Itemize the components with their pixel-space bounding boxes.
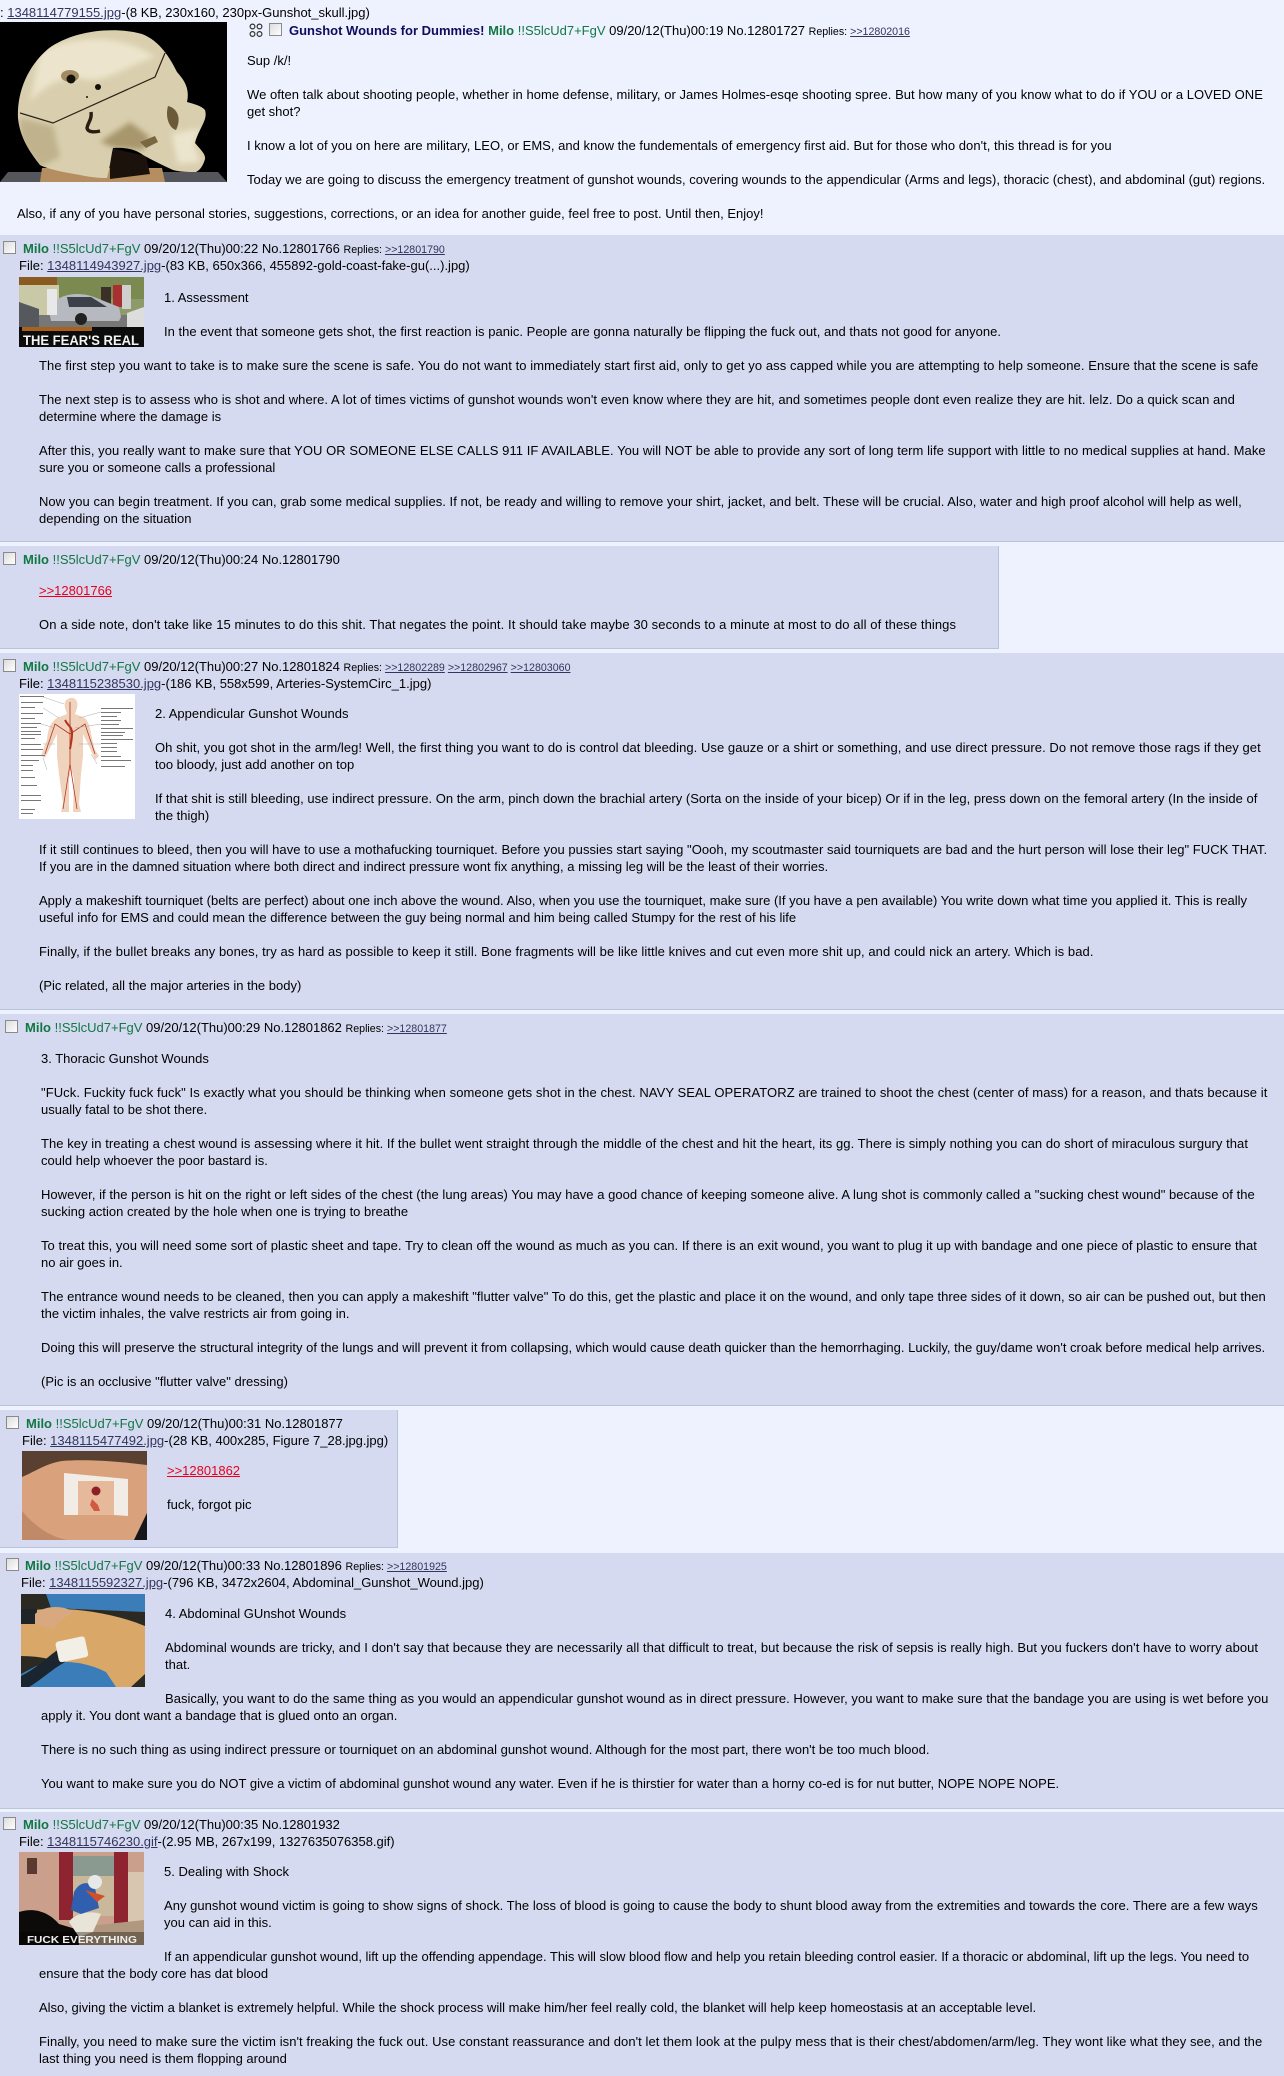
text block: thoracic wounds [41, 1051, 1268, 1389]
file info line: File: 1348115746230.gif-(2.95 MB, 267x199, 1327635076358.gif) [19, 1834, 395, 1849]
text block: shock treatment: Finally, you need to make sure the victim isn't freaking the fuck out. Use constant reassurance and don't let them look at the pulpy mess that is their chest/abdomen/arm/leg. They wont like what they see, and the [39, 2034, 1262, 2049]
text block: appendicular intro: too bloody, just add another on top [155, 757, 354, 772]
text block: intro: I know a lot of you on here are military, LEO, or EMS, and know the fundementals of emergency first aid. But for those who don't, this thread is for you [247, 138, 1112, 153]
image: abdominal wound photo [21, 1594, 145, 1687]
text block: abdominal intro [165, 1606, 1268, 1706]
text block: thoracic wounds: Doing this will preserve the structural integrity of the lungs and will prevent it from collapsing, which would cause death quicker than the hemorrhaging. Luckily, the guy/dame won't croak before medical help arrives. [41, 1340, 1265, 1355]
checkbox [6, 1558, 19, 1571]
text block: tourniquet advice: (Pic related, all the major arteries in the body) [39, 978, 301, 993]
text block: thoracic wounds: usually fatal to be shot there. [41, 1102, 207, 1117]
text block: abdominal treatment [41, 1708, 1059, 1791]
checkbox [5, 1020, 18, 1033]
text block: shock intro: If an appendicular gunshot wound, lift up the offending appendage. This will slow blood flow and help you retain bleeding control easier. If a thoracic or abdominal, lift up the legs. You need to [164, 1949, 1249, 1964]
panel: post 7 dealing with shock [0, 1812, 1284, 2076]
text block: intro: Today we are going to discuss the emergency treatment of gunshot wounds, covering wounds to the appendicular (Arms and legs), thoracic (chest), and abdominal (gut) regions. [247, 172, 1265, 187]
text block: thoracic wounds: sucking action created by the hole when one is trying to breathe [41, 1204, 408, 1219]
panel: post 3 appendicular wounds [0, 653, 1284, 1010]
text block: closing note: Also, if any of you have personal stories, suggestions, corrections, or an idea for another guide, feel free to post. Until then, Enjoy! [17, 206, 763, 221]
post header: Milo !!S5lcUd7+FgV 09/20/12(Thu)00:29 No.12801862 Replies: >>12801877 [25, 1020, 447, 1035]
text block: thoracic wounds: The key in treating a chest wound is assessing where it hit. If the bullet went straight through the middle of the chest and hit the heart, its gg. There is simply nothing you can do short of miraculous surgury that [41, 1136, 1248, 1151]
image: skull with gunshot wounds [0, 22, 227, 182]
text block: abdominal treatment: There is no such thing as using indirect pressure or tourniquet on an abdominal gunshot wound. Although for the most part, there won't be too much blood. [41, 1742, 929, 1757]
text block: thoracic wounds: "FUck. Fuckity fuck fuck" Is exactly what you should be thinking when someone gets shot in the chest. NAVY SEAL OPERATORZ are trained to shoot the chest (center of mass) for a reason, and thats because it [41, 1085, 1267, 1100]
text block: appendicular intro: If that shit is still bleeding, use indirect pressure. On the arm, pinch down the brachial artery (Sorta on the inside of your bicep) Or if in the leg, press down on the femoral artery (In the inside of [155, 791, 1257, 806]
text block: appendicular intro [155, 706, 1261, 823]
checkbox [269, 23, 282, 36]
panel: post 5 forgot pic [0, 1410, 398, 1548]
checkbox [3, 659, 16, 672]
text block: abdominal intro: Abdominal wounds are tricky, and I don't say that because they are necessarily all that difficult to treat, but because the risk of sepsis is really high. But you fuckers don't have to worry about [165, 1640, 1258, 1655]
text block: tourniquet advice: Apply a makeshift tourniquet (belts are perfect) about one inch above the wound. Also, when you use the tourniquet, make sure (If you have a pen available) You write down what time you applied it. This is really [39, 893, 1247, 908]
file info line: File: 1348114943927.jpg-(83 KB, 650x366, 455892-gold-coast-fake-gu(...).jpg) [19, 258, 470, 273]
image: fuck everything gif [19, 1852, 144, 1945]
text block: appendicular intro: Oh shit, you got shot in the arm/leg! Well, the first thing you want to do is control dat bleeding. Use gauze or a shirt or something, and use direct pressure. Do not remove those rags if they get [155, 740, 1261, 755]
text block: intro: Sup /k/! [247, 53, 291, 68]
icon: quick-reply glyph [250, 24, 262, 37]
text block: shock treatment [39, 1966, 1262, 2066]
text block: abdominal intro: 4. Abdominal GUnshot Wounds [165, 1606, 346, 1621]
text block: assessment steps [39, 358, 1266, 526]
text block: thoracic wounds: The entrance wound needs to be cleaned, then you can apply a makeshift "flutter valve" To do this, get the plastic and place it on the wound, and only tape three sides of it down, so air can be pushed out, but then [41, 1289, 1266, 1304]
file info line: File: 1348115238530.jpg-(186 KB, 558x599, Arteries-SystemCirc_1.jpg) [19, 676, 431, 691]
text block: assessment steps: sure you or someone calls a professional [39, 460, 275, 475]
text block: assessment steps: depending on the situation [39, 511, 192, 526]
text block: tourniquet advice [39, 842, 1267, 993]
checkbox [3, 1817, 16, 1830]
text block: tourniquet advice: If it still continues to bleed, then you will have to use a mothafucking tourniquet. Before you pussies start saying "Oooh, my scoutmaster said tourniquets are bad and the hurt person will lose their leg" FUCK THAT. [39, 842, 1267, 857]
checkbox [6, 1416, 19, 1429]
text block: assessment steps: determine where the damage is [39, 409, 221, 424]
text block: thoracic wounds: To treat this, you will need some sort of plastic sheet and tape. Try to clean off the wound as much as you can. If there is an exit wound, you want to plug it up with bandage and one piece of plastic to ensure that [41, 1238, 1257, 1253]
text block: tourniquet advice: Finally, if the bullet breaks any bones, try as hard as possible to keep it still. Bone fragments will be like little knives and cut even more shit up, and could nick an artery. Which is bad. [39, 944, 1094, 959]
text block: shock intro: 5. Dealing with Shock [164, 1864, 289, 1879]
text block: tourniquet advice: useful info for EMS and could mean the difference between the guy being normal and him being called Stumpy for the rest of his life [39, 910, 796, 925]
text block: thoracic wounds: could help whoever the poor bastard is. [41, 1153, 268, 1168]
text block: thoracic wounds: no air goes in. [41, 1255, 123, 1270]
text block: assessment steps: The next step is to assess who is shot and where. A lot of times victims of gunshot wounds won't even know where they are hit, and sometimes people dont even realize they are hit. lelz. Do a quick scan and [39, 392, 1235, 407]
panel: post 6 abdominal wounds [0, 1553, 1284, 1809]
panel: post 2 side note [0, 546, 999, 649]
text block: abdominal treatment: apply it. You dont want a bandage that is glued onto an organ. [41, 1708, 397, 1723]
post header: Gunshot Wounds for Dummies! Milo !!S5lcUd7+FgV 09/20/12(Thu)00:19 No.12801727 Replies: >>12802016 [289, 23, 910, 38]
post header: Milo !!S5lcUd7+FgV 09/20/12(Thu)00:35 No.12801932 [23, 1817, 340, 1832]
text block: intro [247, 53, 1265, 187]
post header: Milo !!S5lcUd7+FgV 09/20/12(Thu)00:31 No.12801877 [26, 1416, 343, 1431]
post header: Milo !!S5lcUd7+FgV 09/20/12(Thu)00:27 No.12801824 Replies: >>12802289 >>12802967 >>12803060 [23, 659, 570, 674]
text block: thoracic wounds: However, if the person is hit on the right or left sides of the chest (the lung areas) You may have a good chance of keeping someone alive. A lung shot is commonly called a "sucking chest wound" because of the [41, 1187, 1255, 1202]
file info line: File: 1348115477492.jpg-(28 KB, 400x285, Figure 7_28.jpg.jpg) [22, 1433, 388, 1448]
text block: assessment intro: In the event that someone gets shot, the first reaction is panic. People are gonna naturally be flipping the fuck out, and thats not good for anyone. [164, 324, 1001, 339]
text block: intro: get shot? [247, 104, 300, 119]
text block: assessment steps: The first step you want to take is to make sure the scene is safe. You do not want to immediately start first aid, only to get yo ass capped while you are attempting to help someone. Ensure that the scene is safe [39, 358, 1258, 373]
image: the fear's real [19, 277, 144, 347]
text block: shock treatment: last thing you need is them flopping around [39, 2051, 287, 2066]
text block: thoracic wounds: (Pic is an occlusive "flutter valve" dressing) [41, 1374, 288, 1389]
text block: appendicular intro: 2. Appendicular Gunshot Wounds [155, 706, 348, 721]
text block: appendicular intro: the thigh) [155, 808, 209, 823]
text block: assessment steps: After this, you really want to make sure that YOU OR SOMEONE ELSE CALLS 911 IF AVAILABLE. You will NOT be able to provide any sort of long term life support with little to no medical supplies at hand. Make [39, 443, 1266, 458]
text block: shock intro: Any gunshot wound victim is going to show signs of shock. The loss of blood is going to cause the body to shunt blood away from the extremities and towards the core. There are a few ways [164, 1898, 1258, 1913]
image: arteries diagram [19, 694, 135, 819]
text block: shock intro: you can aid in this. [164, 1915, 272, 1930]
file info line: File: 1348115592327.jpg-(796 KB, 3472x2604, Abdominal_Gunshot_Wound.jpg) [21, 1575, 484, 1590]
text block: abdominal intro: Basically, you want to do the same thing as you would an appendicular gunshot wound as in direct pressure. However, you want to make sure that the bandage you are using is wet before you [165, 1691, 1268, 1706]
panel: original post [0, 8, 1264, 220]
text block: side note: On a side note, don't take like 15 minutes to do this shit. That negates the point. It should take maybe 30 seconds to a minute at most to do all of these things [39, 617, 956, 632]
quote link: >>12801862 [167, 1463, 240, 1478]
text block: shock treatment: ensure that the body core has dat blood [39, 1966, 268, 1981]
checkbox [3, 241, 16, 254]
text block: shock intro [164, 1864, 1258, 1964]
text block: thoracic wounds: the victim inhales, the valve restricts air from going in. [41, 1306, 350, 1321]
checkbox [3, 552, 16, 565]
text block: abdominal treatment: You want to make sure you do NOT give a victim of abdominal gunshot wound any water. Even if he is thirstier for water than a horny co-ed is for nut butter, NOPE NOPE NOPE. [41, 1776, 1059, 1791]
text block: intro: We often talk about shooting people, whether in home defense, military, or James Holmes-esqe shooting spree. But how many of you know what to do if YOU or a LOVED ONE [247, 87, 1263, 102]
text block: abdominal intro: that. [165, 1657, 190, 1672]
text block: assessment intro: 1. Assessment [164, 290, 249, 305]
text block: shock treatment: Also, giving the victim a blanket is extremely helpful. While the shock process will make him/her feel really cold, the blanket will help keep homeostasis at an acceptable level. [39, 2000, 1036, 2015]
panel: post 1 assessment [0, 235, 1284, 542]
text block: assessment steps: Now you can begin treatment. If you can, grab some medical supplies. If not, be ready and willing to remove your shirt, jacket, and belt. These will be crucial. Also, water and high proof alcohol will help as well, [39, 494, 1242, 509]
image: occlusive dressing on chest [22, 1451, 147, 1540]
panel: post 4 thoracic wounds [0, 1014, 1284, 1406]
text block: assessment intro [164, 290, 1001, 339]
file info line: : 1348114779155.jpg-(8 KB, 230x160, 230px-Gunshot_skull.jpg) [0, 5, 370, 20]
post header: Milo !!S5lcUd7+FgV 09/20/12(Thu)00:24 No.12801790 [23, 552, 340, 567]
post header: Milo !!S5lcUd7+FgV 09/20/12(Thu)00:22 No.12801766 Replies: >>12801790 [23, 241, 445, 256]
text block: forgot pic: fuck, forgot pic [167, 1497, 252, 1512]
text block: thoracic wounds: 3. Thoracic Gunshot Wounds [41, 1051, 209, 1066]
post header: Milo !!S5lcUd7+FgV 09/20/12(Thu)00:33 No.12801896 Replies: >>12801925 [25, 1558, 447, 1573]
quote link: >>12801766 [39, 583, 112, 598]
text block: tourniquet advice: If you are in the damned situation where both direct and indirect pressure wont fix anything, a missing leg will be the least of their worries. [39, 859, 828, 874]
